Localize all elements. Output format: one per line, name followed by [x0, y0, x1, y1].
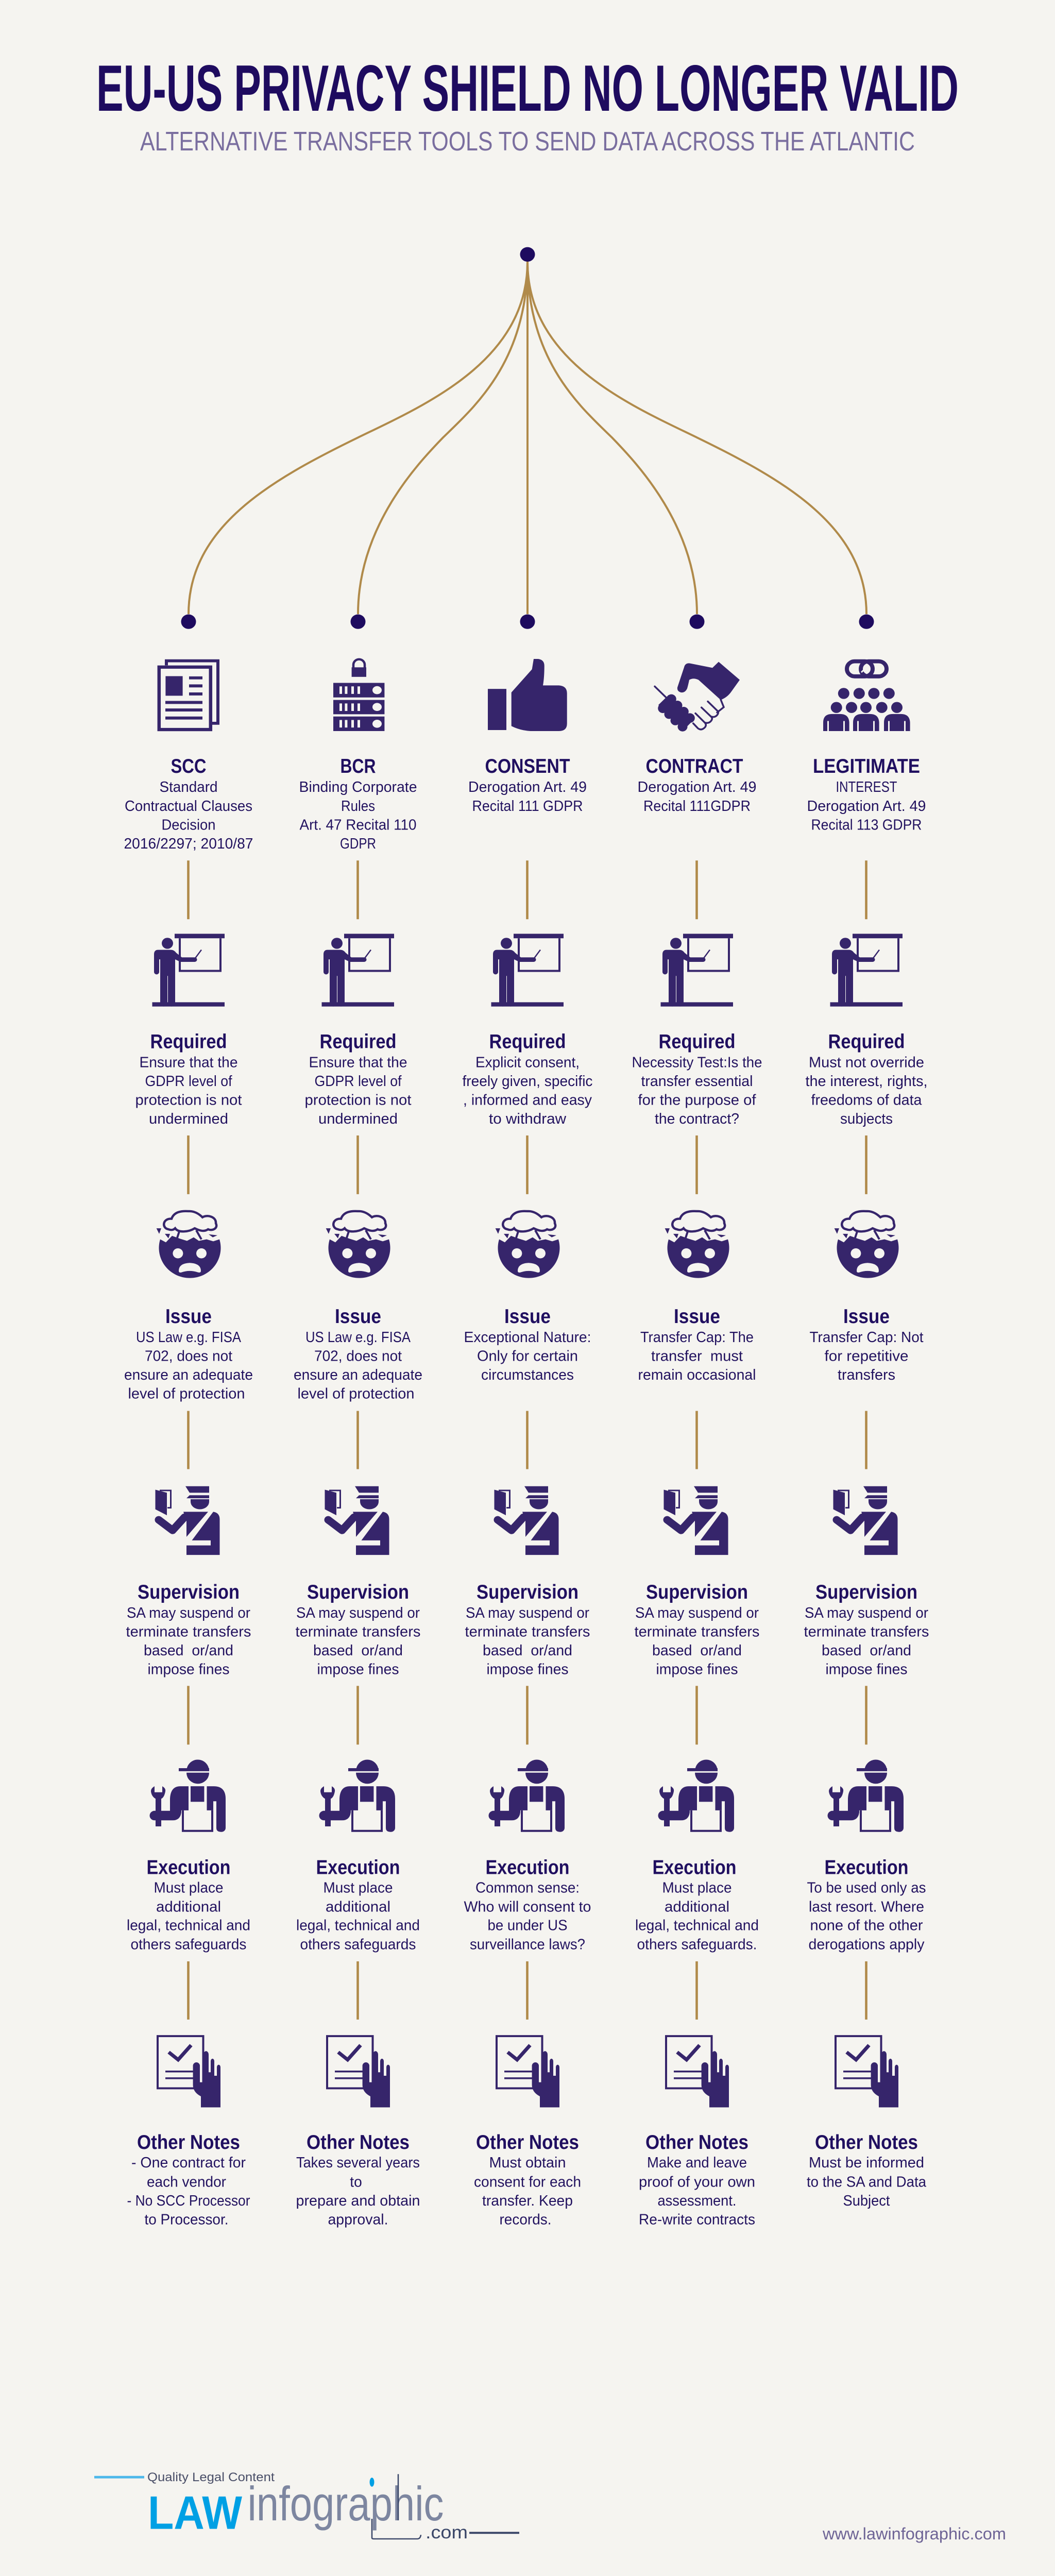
- icon: thumbs up: [488, 659, 567, 731]
- icon: mind blown face: [665, 1211, 729, 1278]
- text block: required: undermined: [149, 1111, 228, 1127]
- icon: worker: [319, 1759, 395, 1832]
- text block: required: subjects: [840, 1111, 893, 1127]
- icon: officer: [833, 1486, 897, 1555]
- text block: other notes: each vendor: [147, 2174, 226, 2190]
- heading: SCC: SCC: [171, 755, 206, 777]
- heading: Issue: Issue: [843, 1306, 890, 1328]
- text block: issue: level of protection: [128, 1386, 245, 1402]
- text block: other notes: approval.: [328, 2212, 388, 2228]
- text block: required: , informed and easy: [463, 1092, 592, 1108]
- text block: other notes: Subject: [843, 2193, 890, 2209]
- heading: Required: Required: [828, 1030, 905, 1053]
- text block: supervision: impose fines: [825, 1662, 907, 1677]
- icon: worker: [488, 1759, 565, 1832]
- text block: SCC description: Standard: [160, 779, 218, 795]
- text block: required: the contract?: [655, 1111, 739, 1127]
- text block: required: protection is not: [305, 1092, 412, 1108]
- connector: [356, 1686, 359, 1744]
- text block: required: freedoms of data: [811, 1092, 922, 1108]
- text block: other notes: to Processor.: [144, 2212, 228, 2228]
- logo: Law Infographic: [94, 2470, 519, 2543]
- icon: checklist in hand: [836, 2036, 898, 2107]
- text block: other notes: [296, 2155, 420, 2228]
- text block: SCC description: Decision: [162, 817, 216, 833]
- text block: supervision: SA may suspend or: [127, 1605, 250, 1621]
- text block: supervision: impose fines: [147, 1662, 229, 1677]
- connector: [695, 1136, 698, 1194]
- heading: Required: Required: [150, 1030, 227, 1053]
- text block: required: Necessity Test:Is the: [632, 1055, 762, 1071]
- text block: execution: additional: [326, 1899, 390, 1915]
- text block: issue: [638, 1330, 756, 1383]
- connector: [526, 860, 529, 919]
- icon: checklist in hand: [327, 2036, 390, 2107]
- connector: [187, 1686, 190, 1744]
- text block: required: Ensure that the: [309, 1055, 407, 1071]
- text block: execution: Who will consent to: [464, 1899, 591, 1915]
- connector: [695, 1411, 698, 1469]
- connector: [695, 1961, 698, 2020]
- text block: supervision: terminate transfers: [296, 1624, 420, 1640]
- text block: execution: Must place: [154, 1880, 224, 1896]
- text block: execution: derogations apply: [809, 1937, 925, 1953]
- connector: [526, 1411, 529, 1469]
- heading: Issue: Issue: [674, 1306, 720, 1328]
- icon: presenter: [660, 934, 733, 1007]
- heading: Supervision: Supervision: [477, 1581, 578, 1603]
- text block: supervision: based or/and: [822, 1642, 911, 1659]
- heading: Issue: Issue: [165, 1306, 212, 1328]
- text block: issue: [464, 1330, 591, 1383]
- icon: presenter: [321, 934, 394, 1007]
- text block: execution: legal, technical and: [635, 1918, 759, 1934]
- heading: Supervision: Supervision: [307, 1581, 409, 1603]
- text block: required: [305, 1055, 411, 1127]
- text block: execution: legal, technical and: [296, 1918, 420, 1934]
- text block: other notes: Must obtain: [489, 2155, 566, 2171]
- text block: required: Explicit consent,: [475, 1055, 580, 1071]
- icon: worker: [149, 1759, 226, 1832]
- icon: mind blown face: [157, 1211, 220, 1278]
- icon: documents: [159, 659, 219, 730]
- text block: legitimate interest description: INTEREST: [836, 779, 897, 795]
- text block: BCR description: Rules: [341, 798, 375, 815]
- text block: required: undermined: [318, 1111, 398, 1127]
- text block: execution: [807, 1880, 926, 1953]
- heading: Issue: Issue: [335, 1306, 381, 1328]
- icon: officer: [156, 1486, 219, 1555]
- logo: Law Infographic: .com: [426, 2522, 468, 2543]
- website url: www.lawinfographic.com: [822, 2524, 1006, 2543]
- text block: other notes: assessment.: [657, 2193, 736, 2209]
- icon: locked server: [333, 659, 384, 731]
- connector: [526, 1686, 529, 1744]
- text block: other notes: [639, 2155, 755, 2228]
- icon: checklist in hand: [666, 2036, 729, 2107]
- icon: presenter: [830, 934, 903, 1007]
- text block: required: the interest, rights,: [806, 1073, 928, 1090]
- logo: Law Infographic: infographic: [248, 2477, 444, 2531]
- panel: CONSENT column: [463, 659, 592, 2228]
- heading: CONSENT: CONSENT: [485, 755, 570, 777]
- text block: supervision: based or/and: [652, 1642, 742, 1659]
- connector: [356, 1411, 359, 1469]
- icon: checklist in hand: [497, 2036, 559, 2107]
- text block: execution: none of the other: [810, 1918, 923, 1934]
- text block: BCR description: GDPR: [340, 836, 376, 852]
- text block: issue: Exceptional Nature:: [464, 1330, 591, 1346]
- text block: required: GDPR level of: [314, 1073, 402, 1090]
- heading: Required: Required: [489, 1030, 566, 1053]
- panel: CONTRACT column: [632, 662, 762, 2228]
- text block: consent description: [468, 779, 587, 815]
- icon: checklist in hand: [158, 2036, 220, 2107]
- heading: Supervision: Supervision: [646, 1581, 748, 1603]
- connector: [865, 1411, 867, 1469]
- text block: contract description: [638, 779, 756, 815]
- heading: CONTRACT: CONTRACT: [646, 755, 743, 777]
- icon: officer: [663, 1486, 728, 1555]
- text block: required: [135, 1055, 242, 1127]
- connector: [695, 1686, 698, 1744]
- text block: execution: be under US: [487, 1918, 568, 1934]
- text block: supervision: based or/and: [144, 1642, 233, 1659]
- text block: required: freely given, specific: [463, 1073, 593, 1090]
- text block: other notes: [127, 2155, 250, 2228]
- text block: contract description: Recital 111GDPR: [643, 798, 751, 815]
- text block: other notes: [474, 2155, 581, 2228]
- text block: issue: for repetitive: [824, 1348, 908, 1365]
- panel: LEGITIMATE column: [804, 662, 929, 2209]
- connector: [187, 1136, 190, 1194]
- panel: BCR column: [294, 659, 422, 2228]
- text block: supervision: SA may suspend or: [805, 1605, 928, 1621]
- panel: SCC column: [124, 659, 253, 2228]
- text block: legitimate interest description: [807, 779, 926, 833]
- text block: supervision: impose fines: [486, 1662, 568, 1677]
- text block: SCC description: 2016/2297; 2010/87: [124, 836, 253, 852]
- heading: Other Notes: Other Notes: [476, 2131, 579, 2154]
- text block: supervision: based or/and: [313, 1642, 403, 1659]
- text block: issue: [294, 1330, 422, 1402]
- text block: other notes: [807, 2155, 927, 2209]
- text block: other notes: Re-write contracts: [639, 2212, 755, 2228]
- icon: mind blown face: [496, 1211, 559, 1278]
- text block: execution: Must place: [324, 1880, 393, 1896]
- text block: BCR description: Binding Corporate: [299, 779, 417, 795]
- text block: other notes: Must be informed: [809, 2155, 924, 2171]
- text block: supervision: [126, 1605, 251, 1677]
- text block: supervision: [296, 1605, 420, 1677]
- text block: supervision: terminate transfers: [465, 1624, 590, 1640]
- text block: execution: Common sense:: [475, 1880, 580, 1896]
- text block: consent description: Derogation Art. 49: [468, 779, 587, 795]
- connector: [865, 860, 867, 919]
- connector: [356, 1961, 359, 2020]
- heading: Required: Required: [658, 1030, 735, 1053]
- text block: supervision: SA may suspend or: [635, 1605, 759, 1621]
- icon: mind blown face: [835, 1211, 898, 1278]
- text block: supervision: [635, 1605, 759, 1677]
- text block: supervision: impose fines: [656, 1662, 738, 1677]
- text block: execution: Must place: [662, 1880, 731, 1896]
- logo: Law Infographic: LAW: [148, 2487, 242, 2539]
- text block: BCR description: [299, 779, 417, 852]
- text block: supervision: terminate transfers: [804, 1624, 929, 1640]
- heading: Other Notes: Other Notes: [307, 2131, 410, 2154]
- connector: [356, 1136, 359, 1194]
- text block: execution: others safeguards: [130, 1937, 247, 1953]
- text block: SCC description: [124, 779, 253, 852]
- icon: worker: [827, 1759, 904, 1832]
- heading: Other Notes: Other Notes: [815, 2131, 918, 2154]
- text block: execution: [635, 1880, 759, 1953]
- icon: presenter: [491, 934, 564, 1007]
- text block: execution: additional: [156, 1899, 221, 1915]
- tree diagram: root node branching to five tools: [181, 247, 874, 629]
- icon: mind blown face: [326, 1211, 390, 1278]
- text block: issue: ensure an adequate: [124, 1367, 253, 1383]
- text block: other notes: records.: [500, 2212, 552, 2228]
- text block: required: [806, 1055, 928, 1127]
- heading: Supervision: Supervision: [815, 1581, 917, 1603]
- text block: other notes: Make and leave: [647, 2155, 747, 2171]
- heading: Execution: Execution: [316, 1856, 400, 1878]
- icon: worker: [658, 1759, 734, 1832]
- connector: [695, 860, 698, 919]
- connector: [526, 1136, 529, 1194]
- connector: [865, 1136, 867, 1194]
- heading: LEGITIMATE: LEGITIMATE: [813, 755, 920, 777]
- text block: supervision: [804, 1605, 929, 1677]
- text block: execution: To be used only as: [807, 1880, 926, 1896]
- text block: other notes: - One contract for: [131, 2155, 246, 2171]
- connector: [865, 1686, 867, 1744]
- text block: required: Must not override: [809, 1055, 924, 1071]
- text block: other notes: Takes several years: [296, 2155, 420, 2171]
- text block: execution: [296, 1880, 420, 1953]
- text block: supervision: [465, 1605, 590, 1677]
- connector: [865, 1961, 867, 2020]
- text block: required: [632, 1055, 762, 1127]
- text block: execution: legal, technical and: [127, 1918, 250, 1934]
- text block: supervision: impose fines: [317, 1662, 399, 1677]
- text block: required: GDPR level of: [145, 1073, 232, 1090]
- heading: Execution: Execution: [486, 1856, 570, 1878]
- text block: issue: Transfer Cap: Not: [810, 1330, 924, 1346]
- heading: Execution: Execution: [146, 1856, 231, 1878]
- text block: execution: additional: [665, 1899, 729, 1915]
- icon: officer: [495, 1486, 558, 1555]
- text block: execution: others safeguards: [300, 1937, 416, 1953]
- text block: execution: [464, 1880, 591, 1953]
- text block: required: to withdraw: [489, 1111, 567, 1127]
- connector: [356, 860, 359, 919]
- text block: supervision: SA may suspend or: [296, 1605, 420, 1621]
- text block: legitimate interest description: Derogation Art. 49: [807, 798, 926, 815]
- text block: issue: [810, 1330, 923, 1383]
- text block: other notes: to the SA and Data: [807, 2174, 927, 2190]
- text block: other notes: proof of your own: [639, 2174, 755, 2190]
- text block: SCC description: Contractual Clauses: [125, 798, 252, 815]
- text block: issue: 702, does not: [145, 1348, 232, 1365]
- text block: issue: 702, does not: [314, 1348, 402, 1365]
- text block: consent description: Recital 111 GDPR: [472, 798, 583, 815]
- text block: issue: transfer must: [651, 1348, 743, 1365]
- text block: supervision: terminate transfers: [635, 1624, 759, 1640]
- connector: [187, 1411, 190, 1469]
- connector: [526, 1961, 529, 2020]
- text block: other notes: consent for each: [474, 2174, 581, 2190]
- text block: supervision: SA may suspend or: [466, 1605, 589, 1621]
- text block: issue: US Law e.g. FISA: [305, 1330, 411, 1346]
- connector: [187, 1961, 190, 2020]
- icon: chain over crowd: [823, 662, 910, 731]
- text block: other notes: - No SCC Processor: [127, 2193, 250, 2209]
- text block: required: protection is not: [135, 1092, 242, 1108]
- text block: issue: Transfer Cap: The: [640, 1330, 754, 1346]
- text block: execution: others safeguards.: [637, 1937, 757, 1953]
- text block: issue: US Law e.g. FISA: [136, 1330, 242, 1346]
- heading: Issue: Issue: [504, 1306, 551, 1328]
- text block: required: transfer essential: [641, 1073, 753, 1090]
- heading: Execution: Execution: [652, 1856, 736, 1878]
- text block: required: for the purpose of: [638, 1092, 756, 1108]
- logo: Law Infographic: Quality Legal Content: [147, 2470, 275, 2484]
- text block: issue: [124, 1330, 253, 1402]
- text block: contract description: Derogation Art. 49: [638, 779, 757, 795]
- heading: BCR: BCR: [340, 755, 376, 777]
- connector: [187, 860, 190, 919]
- icon: presenter: [152, 934, 225, 1007]
- text block: issue: transfers: [838, 1367, 895, 1383]
- text block: required: Ensure that the: [139, 1055, 238, 1071]
- heading: Other Notes: Other Notes: [645, 2131, 748, 2154]
- text block: issue: Only for certain: [477, 1348, 578, 1365]
- heading: Required: Required: [319, 1030, 396, 1053]
- text block: other notes: transfer. Keep: [482, 2193, 573, 2209]
- text block: execution: surveillance laws?: [470, 1937, 585, 1953]
- text block: supervision: based or/and: [483, 1642, 572, 1659]
- icon: officer: [325, 1486, 389, 1555]
- text block: issue: level of protection: [298, 1386, 415, 1402]
- heading: Execution: Execution: [824, 1856, 908, 1878]
- text block: execution: [127, 1880, 250, 1953]
- text block: other notes: to: [350, 2174, 362, 2190]
- text block: issue: circumstances: [481, 1367, 574, 1383]
- text block: execution: last resort. Where: [809, 1899, 924, 1915]
- text block: legitimate interest description: Recital 113 GDPR: [811, 817, 922, 833]
- text block: other notes: prepare and obtain: [296, 2193, 420, 2209]
- text block: issue: remain occasional: [638, 1367, 756, 1383]
- heading: Supervision: Supervision: [138, 1581, 240, 1603]
- text block: BCR description: Art. 47 Recital 110: [300, 817, 417, 833]
- heading: Other Notes: Other Notes: [137, 2131, 240, 2154]
- text block: issue: ensure an adequate: [294, 1367, 422, 1383]
- text block: supervision: terminate transfers: [126, 1624, 251, 1640]
- icon: handshake: [655, 662, 740, 732]
- text block: required: [463, 1055, 592, 1127]
